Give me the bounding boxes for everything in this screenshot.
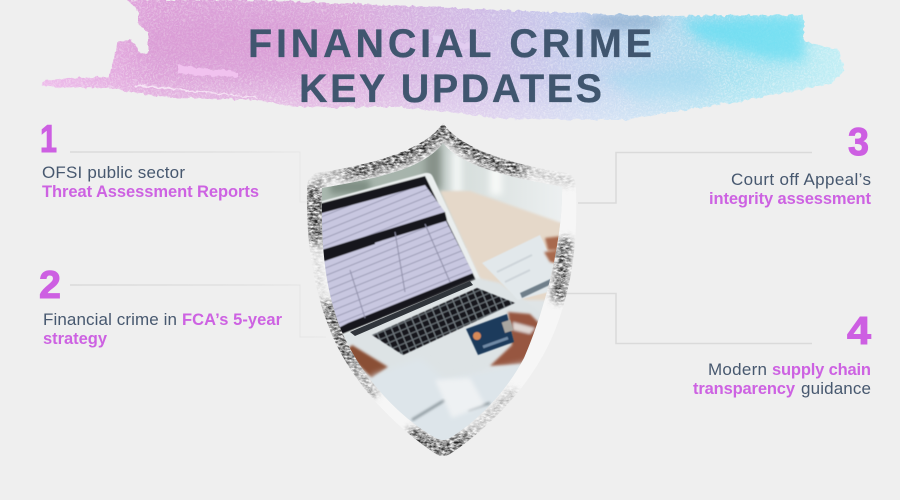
connector: item 4	[565, 294, 812, 344]
item 3	[709, 121, 872, 208]
photo: paper held in hand	[482, 235, 562, 300]
item 4: transparency	[693, 380, 796, 398]
watercolor brush stroke	[30, 0, 860, 125]
item 1: 1	[40, 118, 57, 161]
item 2	[39, 264, 283, 348]
item 4: Modern	[708, 360, 767, 379]
item 3: 3	[848, 121, 869, 164]
item 1: Threat Assessment Reports	[42, 183, 259, 201]
item 4: guidance	[801, 379, 871, 398]
title: KEY UPDATES	[299, 67, 602, 111]
connector: item 2	[70, 285, 326, 337]
item 4: 4	[847, 310, 871, 353]
item 2: 2	[39, 264, 61, 307]
connector: item 1	[70, 152, 308, 202]
item 2: strategy	[43, 330, 108, 348]
photo: blurred wrist and papers	[348, 344, 524, 440]
item 3: integrity assessment	[709, 190, 872, 208]
item 4: supply chain	[772, 361, 871, 379]
shield: photo of laptop, card and papers	[315, 138, 570, 445]
photo: beige table	[440, 191, 570, 300]
photo: laptop base and keyboard	[350, 278, 523, 356]
item 1	[40, 118, 259, 201]
connector: item 3	[578, 152, 812, 203]
shield with photo	[300, 118, 585, 463]
title: FINANCIAL CRIME	[248, 22, 652, 66]
photo: hand holding card	[490, 312, 541, 366]
title	[248, 22, 652, 111]
item 2: FCA’s 5-year	[182, 311, 283, 329]
item 3: Court off Appeal’s	[731, 170, 871, 189]
photo: payment card	[466, 314, 514, 355]
item 4	[693, 310, 871, 398]
item 2: Financial crime in	[43, 310, 177, 329]
shield: silver foil border	[300, 118, 585, 463]
item 1: OFSI public sector	[42, 163, 185, 182]
photo: laptop screen	[315, 173, 480, 345]
